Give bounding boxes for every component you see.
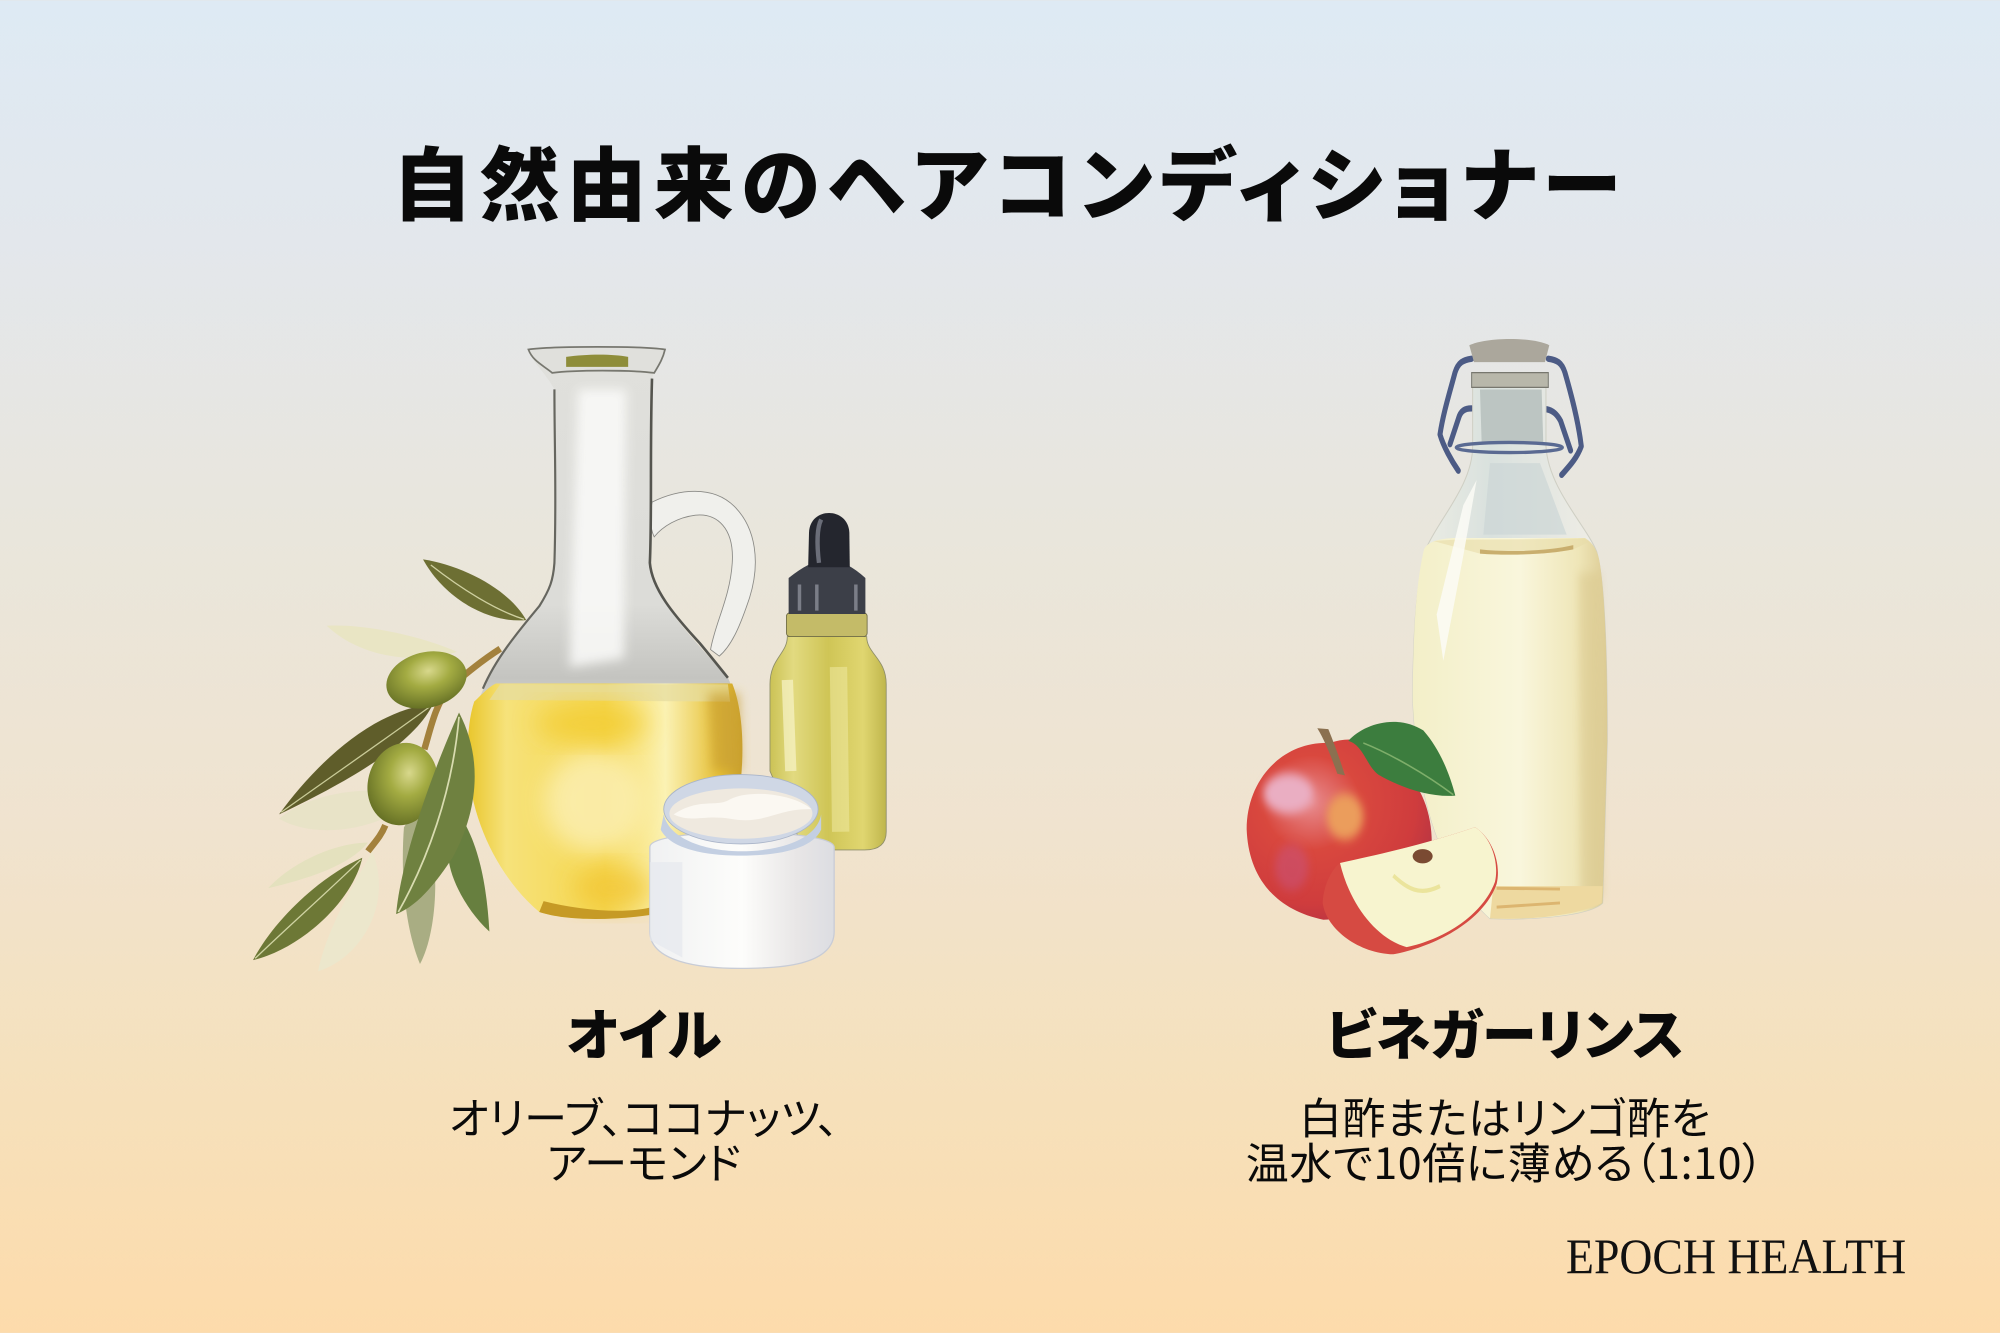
logo: EPOCH HEALTH <box>1566 1228 1906 1284</box>
text: vinegar directions: 温水で10倍に薄める（1:10） <box>1246 1130 1764 1192</box>
text: oil types: アーモンド <box>547 1130 741 1192</box>
icon: jug handle <box>651 491 755 656</box>
title: 自然由来のヘアコンディショナー <box>392 142 1628 231</box>
icon: cream jar <box>650 775 834 968</box>
text: vinegar directions <box>1246 1085 1764 1192</box>
illustration: oil group <box>253 347 886 971</box>
illustration: vinegar group <box>1247 339 1607 954</box>
heading: oil: オイル <box>566 991 722 1071</box>
icon: apple <box>1247 722 1455 920</box>
icon: dropper bottle <box>770 513 886 850</box>
icon: swing-top wire <box>1440 359 1581 475</box>
panel: vinegar label <box>1246 991 1764 1192</box>
icon: apple slice <box>1323 827 1498 954</box>
text: oil types: オリーブ、ココナッツ、 <box>449 1085 839 1147</box>
text: vinegar directions: 白酢またはリンゴ酢を <box>1299 1085 1711 1147</box>
icon: glass jug <box>468 347 742 919</box>
icon: vinegar bottle <box>1413 339 1607 919</box>
icon: olive branch <box>358 643 500 914</box>
icon: wire ring <box>1456 442 1563 453</box>
panel: oil label <box>449 991 839 1192</box>
icon: pale olive leaves <box>268 626 457 971</box>
text: oil types <box>449 1085 839 1192</box>
heading: vinegar rinse: ビネガーリンス <box>1326 991 1684 1071</box>
icon: olive leaves <box>253 559 526 960</box>
